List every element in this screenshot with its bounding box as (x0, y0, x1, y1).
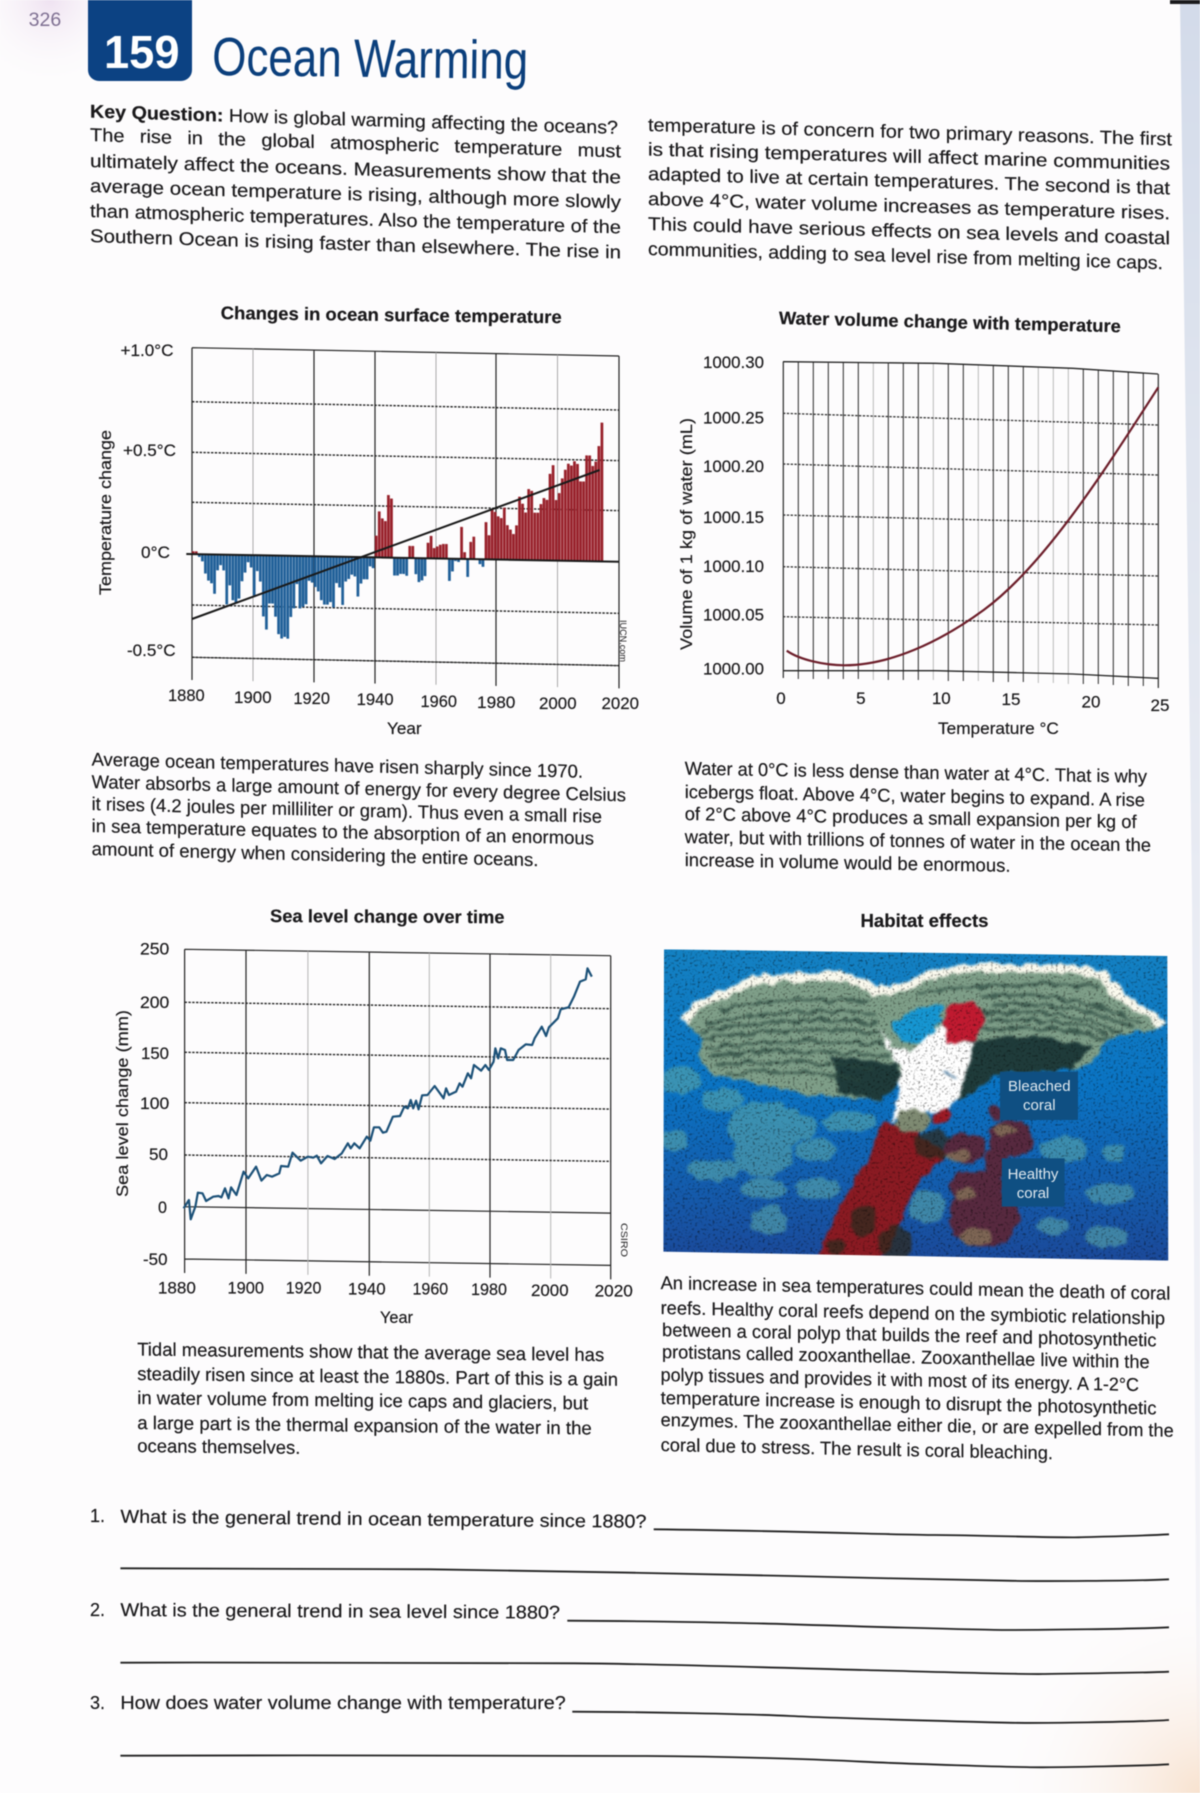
x axis labels: 1900 (234, 688, 272, 707)
x axis labels: 1900 (228, 1278, 264, 1298)
callout: healthy coral (1002, 1158, 1065, 1207)
y axis labels: -50 (143, 1250, 168, 1269)
x axis labels: 25 (1151, 696, 1169, 715)
callout: healthy coral: Healthy (1008, 1166, 1059, 1183)
y axis labels: 0°C (141, 543, 170, 562)
bars: cooler years in blue (198, 554, 484, 642)
volume curve (787, 387, 1158, 665)
intro text right column: above 4°C, water volume increases as temperature rises. (648, 188, 1170, 223)
text: coral bleaching caption: protistans called zooxanthellae. Zooxanthellae live within the (662, 1341, 1150, 1372)
text: sea level caption: oceans themselves. (137, 1435, 300, 1458)
intro text right column: adapted to live at certain temperatures. The second is that (648, 163, 1170, 198)
question 2 (90, 1599, 1169, 1674)
x axis labels: 1880 (168, 686, 205, 705)
red trunk (813, 1122, 948, 1263)
x axis labels: 5 (856, 689, 866, 708)
y axis labels: 150 (141, 1044, 169, 1063)
text: sea level caption: Tidal measurements show that the average sea level has (137, 1338, 604, 1365)
callout: bleached coral: coral (1023, 1097, 1056, 1114)
panel: changes in ocean surface temperature (96, 303, 639, 738)
intro text left column: than atmospheric temperatures. Also the temperature of the (90, 200, 621, 237)
text: ocean temperature caption: amount of energy when considering the entire oceans. (92, 838, 538, 870)
y axis labels: +1.0°C (120, 341, 174, 360)
sea level line (184, 968, 592, 1219)
x axis labels: 2000 (539, 694, 577, 713)
trend line (192, 470, 600, 619)
text: coral bleaching caption: between a coral polyp that builds the reef and photosynthetic (662, 1319, 1157, 1350)
panel: habitat effects (662, 912, 1169, 1262)
question 1: What is the general trend in ocean temperature since 1880? (120, 1506, 647, 1532)
chart heading: Sea level change over time (270, 906, 505, 927)
text: ocean temperature caption: Water absorbs a large amount of energy for every degree Celsius (92, 771, 626, 805)
photo: bleached coral on a reef (662, 948, 1169, 1262)
x axis labels: 1980 (477, 693, 515, 712)
source credit: CSIRO (619, 1223, 629, 1257)
question 3: How does water volume change with temperature? (120, 1692, 566, 1713)
intro text left column: Southern Ocean is rising faster than elsewhere. The rise in (90, 225, 621, 262)
intro text left column: Key Question: How is global warming affecting the oceans? (90, 101, 618, 138)
text: coral bleaching caption: temperature increase is enough to disrupt the photosynthetic (661, 1387, 1156, 1418)
x axis labels: 10 (932, 689, 951, 708)
y axis labels: 250 (140, 940, 169, 958)
activity number badge (88, 0, 192, 81)
x axis labels: 1940 (357, 690, 394, 709)
bars: warmer years in red (192, 415, 603, 562)
text: water volume caption: Water at 0°C is less dense than water at 4°C. That is why (685, 758, 1148, 787)
x axis labels: 0 (776, 689, 786, 708)
y axis labels: 1000.00 (703, 660, 764, 678)
x axis title: Temperature °C (938, 719, 1059, 738)
y axis labels: 50 (149, 1145, 168, 1164)
intro text right column: temperature is of concern for two primary reasons. The first (648, 114, 1172, 149)
x axis labels: 1960 (412, 1280, 448, 1298)
y axis title: Volume of 1 kg of water (mL) (677, 418, 696, 650)
text: water volume caption (684, 757, 1151, 878)
x axis labels: 1920 (293, 689, 330, 708)
callout: bleached coral: Bleached (1008, 1078, 1071, 1095)
page title: Ocean Warming (212, 27, 529, 91)
bleached white stem (878, 1023, 974, 1122)
x axis labels: 15 (1002, 690, 1020, 709)
y axis labels: 1000.10 (703, 557, 764, 576)
question 3: 3. (90, 1693, 105, 1713)
table coral canopy (685, 968, 1166, 1100)
y axis labels (120, 341, 176, 660)
y axis labels: 1000.30 (703, 353, 764, 372)
y axis labels: 100 (140, 1094, 169, 1113)
text: coral bleaching caption: coral due to stress. The result is coral bleaching. (661, 1434, 1053, 1463)
intro text left column (90, 101, 622, 262)
intro text left column: The rise in the global atmospheric temperature must (90, 124, 621, 161)
y axis labels: 200 (140, 993, 169, 1012)
y axis title: Temperature change (96, 430, 115, 595)
x axis labels (158, 1278, 633, 1301)
page number: 326 (29, 10, 61, 31)
text: sea level caption: steadily risen since at least the 1880s. Part of this is a gain (137, 1363, 618, 1390)
intro text right column: communities, adding to sea level rise from melting ice caps. (648, 238, 1163, 273)
x axis labels (776, 689, 1169, 715)
text: coral bleaching caption: An increase in sea temperatures could mean the death of coral (661, 1272, 1170, 1304)
text: coral bleaching caption: polyp tissues and provides it with most of its energy. A 1-2°C (661, 1364, 1139, 1395)
y axis labels: 1000.20 (703, 457, 764, 476)
text: ocean temperature caption: in sea temperature equates to the absorption of an enormous (92, 815, 594, 849)
text: water volume caption: water, but with trillions of tonnes of water in the ocean the (684, 826, 1151, 855)
x axis labels: 1940 (348, 1280, 386, 1298)
chart heading: Water volume change with temperature (779, 308, 1121, 336)
y axis labels: -0.5°C (127, 641, 176, 660)
text: water volume caption: increase in volume would be enormous. (685, 849, 1010, 876)
panel: water volume change with temperature (677, 308, 1169, 738)
text: ocean temperature caption: it rises (4.2 joules per milliliter or gram). Thus even a small rise (92, 793, 602, 827)
red sponge (943, 1002, 984, 1045)
y axis labels: 0 (158, 1198, 167, 1217)
x axis labels: 1980 (471, 1280, 507, 1299)
source credit: IUCN.com (618, 620, 628, 662)
activity number badge: 159 (104, 26, 180, 78)
gap in the canopy (892, 1006, 943, 1043)
text: coral bleaching caption: enzymes. The zooxanthellae either die, or are expelled from the (661, 1409, 1174, 1441)
x axis labels: 2020 (602, 694, 639, 713)
y axis labels: 1000.15 (703, 508, 764, 527)
intro text right column: is that rising temperatures will affect marine communities (648, 139, 1170, 174)
x axis title: Year (387, 719, 422, 738)
intro text left column: ultimately affect the oceans. Measurements show that the (90, 150, 621, 187)
text: sea level caption: a large part is the thermal expansion of the water in the (137, 1412, 592, 1438)
x axis labels (168, 686, 639, 713)
intro text right column (648, 114, 1172, 273)
intro text right column: This could have serious effects on sea levels and coastal (648, 213, 1170, 248)
healthy coral clump (945, 1105, 1034, 1248)
panel: sea level change over time (113, 906, 633, 1327)
title header (88, 0, 529, 91)
text: water volume caption: icebergs float. Above 4°C, water begins to expand. A rise (685, 781, 1145, 810)
question 2: What is the general trend in sea level since 1880? (120, 1599, 560, 1623)
x axis labels: 2000 (531, 1281, 569, 1300)
text: ocean temperature caption (92, 749, 626, 872)
text: sea level caption (137, 1338, 618, 1462)
y axis labels: 1000.05 (703, 606, 764, 624)
text: water volume caption: of 2°C above 4°C produces a small expansion per kg of (685, 803, 1137, 832)
question 1: 1. (90, 1506, 105, 1526)
photo heading: Habitat effects (860, 911, 988, 931)
x axis labels: 2020 (595, 1282, 633, 1301)
x axis labels: 20 (1082, 693, 1100, 712)
question 1 (90, 1506, 1169, 1581)
question 3 (90, 1692, 1169, 1767)
y axis labels: 1000.25 (703, 408, 764, 428)
intro text left column: average ocean temperature is rising, although more slowly (90, 175, 622, 212)
y axis title: Sea level change (mm) (113, 1010, 132, 1197)
x axis labels: 1880 (158, 1278, 196, 1298)
text: sea level caption: in water volume from melting ice caps and glaciers, but (137, 1387, 588, 1413)
text: coral bleaching caption: reefs. Healthy coral reefs depend on the symbiotic relationship (661, 1297, 1165, 1329)
text: ocean temperature caption: Average ocean temperatures have risen sharply since 1970. (92, 749, 583, 782)
y axis labels (703, 353, 764, 678)
question 2: 2. (90, 1600, 105, 1620)
x axis labels: 1920 (286, 1278, 321, 1298)
callout: bleached coral (1000, 1072, 1078, 1120)
y axis labels: +0.5°C (123, 441, 176, 460)
y axis labels (140, 940, 169, 1269)
chart heading: Changes in ocean surface temperature (221, 303, 562, 327)
x axis labels: 1960 (420, 692, 457, 711)
text: coral bleaching caption (661, 1272, 1174, 1466)
x axis title: Year (380, 1308, 413, 1327)
callout: healthy coral: coral (1017, 1185, 1049, 1202)
